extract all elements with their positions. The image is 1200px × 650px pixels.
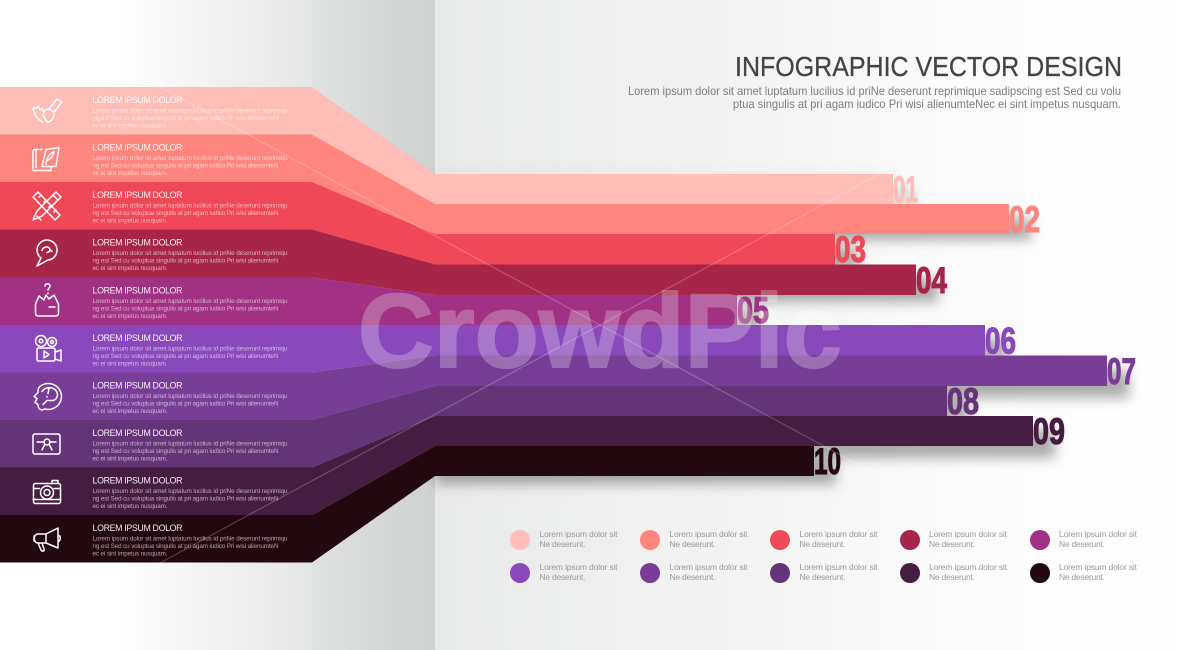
band 01 text: ng est Sed cu voluptua singulis at pri agam iudico Pri wisi alienumteN (92, 115, 279, 122)
band 09 text: Lorem ipsum dolor sit amet luptatum lucilius id priNe deserunt reprimiqu (92, 488, 288, 495)
band 04 text: ng est Sed cu voluptua singulis at pri agam iudico Pri wisi alienumteN (92, 258, 279, 264)
band 05 text: ng est Sed cu voluptua singulis at pri agam iudico Pri wisi alienumteN (92, 306, 279, 312)
band 07 text (92, 380, 288, 415)
band 02 (0, 134, 1040, 240)
band 08 text: ng est Sed cu voluptua singulis at pri agam iudico Pri wisi alienumteN (92, 448, 279, 455)
band 06 text (92, 333, 288, 368)
band 09 (0, 411, 1065, 515)
icon: megaphone (34, 528, 60, 551)
band 10 text: Lorem ipsum dolor sit amet luptatum lucilius id priNe deserunt reprimiqu (92, 536, 288, 542)
band 02 text: ec ei sint impetus nusquam. (92, 170, 168, 177)
icon: ruler and pencil (33, 192, 61, 220)
band 03 text: ng est Sed cu voluptua singulis at pri agam iudico Pri wisi alienumteN (92, 210, 279, 217)
band 08 text: Lorem ipsum dolor sit amet luptatum lucilius id priNe deserunt reprimiqu (92, 440, 288, 448)
band 04 (0, 230, 947, 301)
band 07 text: ec ei sint impetus nusquam. (92, 408, 168, 415)
band 07 text: LOREM IPSUM DOLOR (92, 380, 182, 390)
icon: bulb pencil (37, 240, 57, 266)
band 10 (0, 441, 841, 562)
icon: movie camera (36, 336, 61, 361)
band 09 text: ng est Sed cu voluptua singulis at pri agam iudico Pri wisi alienumteN (92, 496, 279, 502)
number 07: 07 (1107, 351, 1136, 392)
band 07 text: Lorem ipsum dolor sit amet luptatum lucilius id priNe deserunt reprimiqu (92, 393, 288, 400)
legend item 3: Ne deserunt. (800, 539, 846, 549)
band 09 text: LOREM IPSUM DOLOR (92, 476, 182, 486)
legend item 6 (510, 562, 618, 583)
band 03 text: LOREM IPSUM DOLOR (92, 190, 182, 200)
band 10 text: ng est Sed cu voluptua singulis at pri agam iudico Pri wisi alienumteN (92, 543, 279, 550)
band 02 text: ng est Sed cu voluptua singulis at pri agam iudico Pri wisi alienumteN (92, 162, 279, 170)
legend item 8: Ne deserunt. (800, 572, 846, 582)
legend item 9: Lorem ipsum dolor sit (929, 562, 1008, 572)
band 05 text: ec ei sint impetus nusquam. (92, 313, 168, 320)
legend item 1 (510, 529, 618, 550)
legend item 7: Ne deserunt. (670, 572, 716, 582)
legend item 10: Lorem ipsum dolor sit (1059, 562, 1138, 572)
legend item 4 (900, 529, 1008, 550)
legend item 1: Ne deserunt. (540, 539, 586, 549)
icon: question box (36, 284, 58, 316)
legend (510, 529, 1138, 583)
band 03 text: ec ei sint impetus nusquam. (92, 218, 168, 224)
band 08 (0, 381, 979, 468)
band 06 text: ng est Sed cu voluptua singulis at pri agam iudico Pri wisi alienumteN (92, 353, 279, 360)
band 01 text: Lorem ipsum dolor sit amet luptatum lucilius id priNe deserunt reprimiqu (92, 108, 288, 114)
legend item 7: Lorem ipsum dolor sit (670, 562, 748, 572)
legend item 8 (770, 562, 878, 583)
band 01 (0, 87, 918, 210)
band 06 text: Lorem ipsum dolor sit amet luptatum lucilius id priNe deserunt reprimiqu (92, 346, 288, 352)
band 03 text (92, 190, 288, 224)
band 08 text (92, 428, 288, 462)
band 02 text: LOREM IPSUM DOLOR (92, 142, 182, 152)
band 04 text: LOREM IPSUM DOLOR (92, 238, 182, 248)
band 05 text (92, 286, 288, 320)
legend item 4: Lorem ipsum dolor sit (929, 529, 1008, 539)
number 09: 09 (1033, 411, 1065, 452)
number 04: 04 (916, 260, 947, 301)
band 08 text: LOREM IPSUM DOLOR (92, 428, 182, 438)
number 10: 10 (814, 441, 841, 482)
band 06 (0, 320, 1016, 372)
band 08 text: ec ei sint impetus nusquam. (92, 456, 168, 462)
description text: ptua singulis at pri agam iudico Pri wisi alienumteNec ei sint impetus nusquam. (733, 97, 1121, 111)
band 01 text: LOREM IPSUM DOLOR (92, 95, 182, 105)
legend item 2: Lorem ipsum dolor sit (670, 529, 748, 539)
legend item 7 (640, 562, 748, 583)
band 03 (0, 182, 866, 270)
band 07 (0, 351, 1136, 420)
band 10 text (92, 523, 288, 558)
band 04 text (92, 238, 288, 272)
band 01 text: ec ei sint impetus nusquam. (92, 122, 168, 130)
band 02 text (92, 142, 288, 177)
legend item 3: Lorem ipsum dolor sit (800, 529, 878, 539)
number 05: 05 (737, 290, 769, 331)
icon: photo camera (34, 480, 60, 504)
icon: head with thought (34, 383, 61, 410)
legend item 6: Ne deserunt. (540, 572, 586, 582)
band 07 text: ng est Sed cu voluptua singulis at pri agam iudico Pri wisi alienumteN (92, 400, 279, 408)
band 04 text: ec ei sint impetus nusquam. (92, 265, 168, 272)
legend item 4: Ne deserunt. (929, 539, 975, 549)
band 02 text: Lorem ipsum dolor sit amet luptatum lucilius id priNe deserunt reprimiqu (92, 155, 288, 162)
band 09 text (92, 476, 288, 510)
description text (628, 84, 1121, 111)
icon: certificate envelope (33, 434, 60, 454)
band 05 text: Lorem ipsum dolor sit amet luptatum lucilius id priNe deserunt reprimiqu (92, 298, 288, 305)
band 10 text: ec ei sint impetus nusquam. (92, 550, 168, 558)
band 05 text: LOREM IPSUM DOLOR (92, 286, 182, 296)
band 04 text: Lorem ipsum dolor sit amet luptatum lucilius id priNe deserunt reprimiqu (92, 250, 288, 257)
legend item 6: Lorem ipsum dolor sit (540, 562, 618, 572)
band 09 text: ec ei sint impetus nusquam. (92, 503, 168, 510)
legend item 10 (1030, 562, 1138, 583)
number 03: 03 (835, 229, 866, 270)
legend item 5 (1030, 529, 1138, 550)
number 01: 01 (893, 169, 918, 210)
watermark: CrowdPic (358, 273, 842, 390)
legend item 9 (900, 562, 1008, 583)
band 03 text: Lorem ipsum dolor sit amet luptatum lucilius id priNe deserunt reprimiqu (92, 202, 288, 210)
band 05 (0, 278, 769, 331)
title: INFOGRAPHIC VECTOR DESIGN (735, 51, 1122, 82)
band 01 text (92, 95, 288, 130)
number 06: 06 (985, 320, 1016, 362)
legend item 9: Ne deserunt. (929, 572, 975, 582)
legend item 3 (770, 529, 878, 550)
legend item 2 (640, 529, 748, 550)
bar drop shadows (435, 171, 1129, 484)
icon: paint brush (33, 99, 62, 122)
description text: Lorem ipsum dolor sit amet luptatum lucilius id priNe deserunt reprimique sadipscing est Sed cu volu (628, 84, 1121, 98)
legend item 5: Ne deserunt. (1059, 539, 1105, 549)
number 02: 02 (1009, 199, 1040, 240)
legend item 2: Ne deserunt. (670, 539, 716, 549)
icon: book and quill (33, 148, 59, 171)
band 06 text: ec ei sint impetus nusquam. (92, 360, 168, 368)
number 08: 08 (947, 381, 979, 422)
legend item 1: Lorem ipsum dolor sit (540, 529, 618, 539)
legend item 10: Ne deserunt. (1059, 572, 1105, 582)
band 10 text: LOREM IPSUM DOLOR (92, 523, 182, 533)
legend item 8: Lorem ipsum dolor sit (800, 562, 878, 572)
band 06 text: LOREM IPSUM DOLOR (92, 333, 182, 343)
legend item 5: Lorem ipsum dolor sit (1059, 529, 1138, 539)
